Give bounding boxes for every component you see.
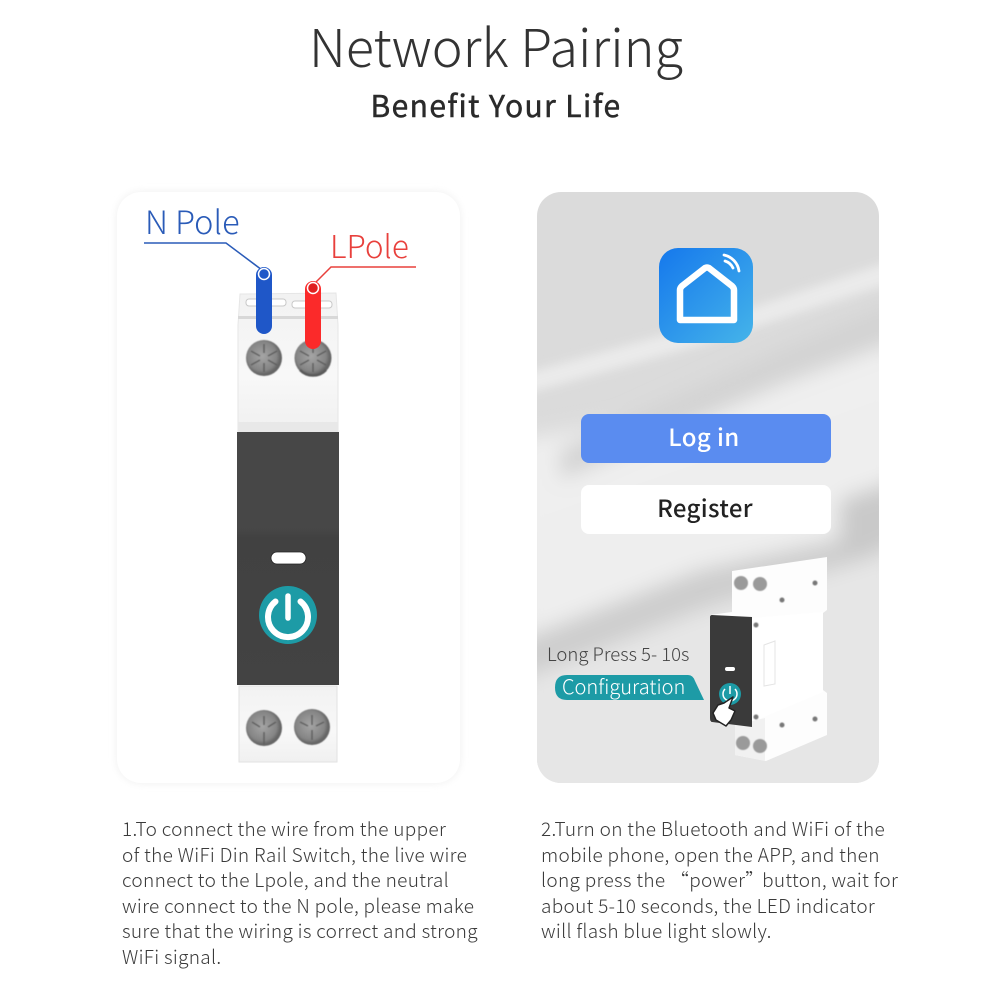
switch body: top <box>238 293 338 432</box>
step 1 text: of the WiFi Din Rail Switch, the live wire <box>122 841 467 868</box>
step 2 text: long press the “power” button, wait for <box>541 866 898 893</box>
icon: smart home app <box>659 248 753 343</box>
dark switch front <box>237 432 339 685</box>
panel: wiring diagram <box>144 242 416 762</box>
Register button <box>581 485 831 534</box>
step 1 text: wire connect to the N pole, please make <box>122 892 474 919</box>
N Pole label: N Pole <box>145 197 240 244</box>
L Pole label: LPole <box>330 222 409 268</box>
step 1 text: WiFi signal. <box>122 943 221 970</box>
step 2 text: 2.Turn on the Bluetooth and WiFi of the <box>541 815 885 842</box>
L pole wire and leader <box>305 267 416 349</box>
step 1 text: sure that the wiring is correct and strong <box>122 917 478 944</box>
Configuration badge <box>555 675 704 700</box>
icon: pressing hand <box>713 697 735 726</box>
Long press label: Long Press 5- 10s <box>547 641 689 667</box>
step 1 text: 1.To connect the wire from the upper <box>122 815 446 842</box>
step 2 text: mobile phone, open the APP, and then <box>541 841 880 868</box>
step 1 text <box>122 815 478 970</box>
Log in button <box>581 414 831 463</box>
terminal screws: top <box>246 340 332 376</box>
step 1 text: connect to the Lpole, and the neutral <box>122 866 449 893</box>
switch body: bottom <box>239 686 337 762</box>
N pole wire and leader <box>144 243 272 334</box>
small switch illustration <box>710 557 827 761</box>
title: Network Pairing <box>309 7 683 82</box>
step 2 text: will flash blue light slowly. <box>541 917 772 944</box>
step 2 text <box>541 815 898 944</box>
Register text: Register <box>657 489 753 524</box>
panel: app login <box>537 192 879 783</box>
step 2 text: about 5-10 seconds, the LED indicator <box>541 892 875 919</box>
Configuration label: Configuration <box>562 671 685 700</box>
Log in text: Log in <box>668 418 740 453</box>
subtitle: Benefit Your Life <box>371 82 621 126</box>
